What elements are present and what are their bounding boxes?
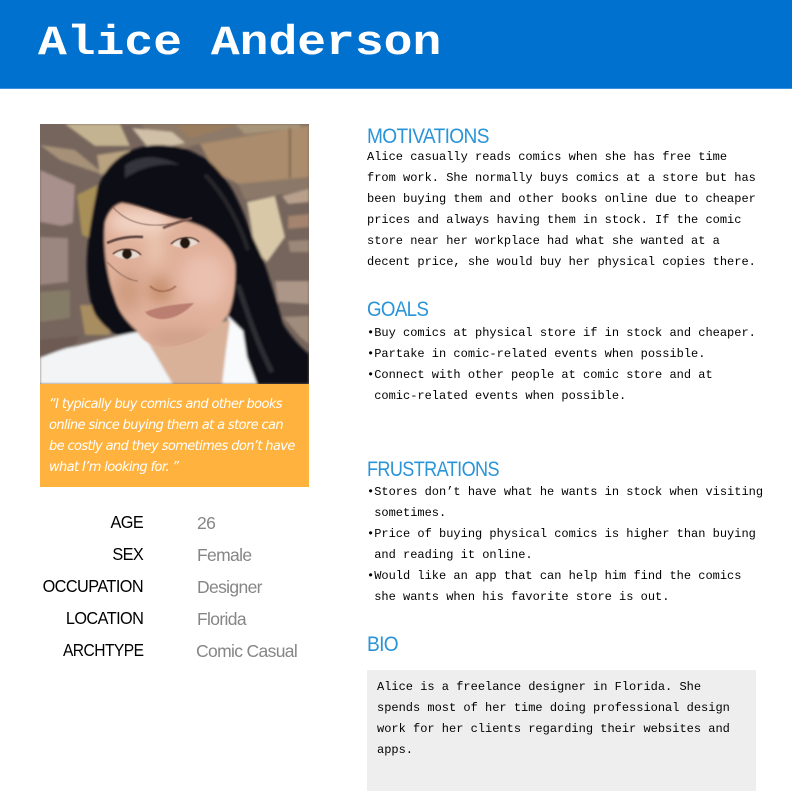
text: motivations: Alice casually reads comics when she has free time from work. She normally buys comics at a store but has been buying them and other books online due to cheaper prices and always having them in stock. If the comic store near her workplace had what she wanted at a decent price, she would buy her physical copies there. bbox=[367, 150, 756, 269]
sex bbox=[112, 544, 252, 565]
archetype: Comic Casual bbox=[196, 641, 297, 661]
face shading bbox=[108, 209, 228, 347]
heading: motivations: MOTIVATIONS bbox=[367, 125, 489, 148]
portrait photo bbox=[40, 124, 309, 384]
quote text: “I typically buy comics and other books online since buying them at a store can be costly and they sometimes don’t have what I’m looking for. ” bbox=[49, 397, 295, 475]
hair highlight bbox=[125, 157, 180, 178]
location bbox=[65, 608, 247, 629]
facial features bbox=[107, 206, 199, 319]
age: AGE bbox=[110, 512, 143, 532]
header band bbox=[0, 0, 792, 89]
title: Alice Anderson bbox=[38, 21, 441, 67]
panel: bio bbox=[367, 670, 756, 791]
stone wall bbox=[40, 124, 309, 358]
archetype bbox=[62, 640, 297, 661]
profile facts bbox=[42, 512, 297, 661]
face bbox=[104, 203, 235, 347]
archetype: ARCHTYPE bbox=[62, 640, 143, 660]
heading: frustrations: FRUSTRATIONS bbox=[367, 458, 499, 481]
text: bio: Alice is a freelance designer in Florida. She spends most of her time doing professional design work for her clients regarding their websites and apps. bbox=[377, 680, 730, 757]
quote panel bbox=[40, 384, 309, 487]
sex: Female bbox=[197, 545, 251, 565]
neck bbox=[147, 320, 230, 384]
text: frustrations: •Stores don’t have what he wants in stock when visiting sometimes. •Price of buying physical comics is higher than buying and reading it online. •Would like an app that can help him find the comics she wants when his favorite store is out. bbox=[367, 485, 763, 604]
occupation bbox=[42, 576, 262, 597]
hair bbox=[87, 145, 309, 384]
occupation: OCCUPATION bbox=[42, 576, 143, 596]
location: Florida bbox=[197, 609, 246, 629]
text: goals: •Buy comics at physical store if in stock and cheaper. •Partake in comic-related events when possible. •Connect with other people at comic store and at comic-related events when possible. bbox=[367, 326, 756, 403]
heading: goals: GOALS bbox=[367, 298, 428, 321]
sex: SEX bbox=[112, 544, 143, 564]
location: LOCATION bbox=[65, 608, 143, 628]
age bbox=[110, 512, 216, 533]
shirt bbox=[40, 332, 173, 384]
age: 26 bbox=[197, 513, 215, 533]
occupation: Designer bbox=[197, 577, 262, 597]
heading: bio: BIO bbox=[367, 633, 398, 656]
